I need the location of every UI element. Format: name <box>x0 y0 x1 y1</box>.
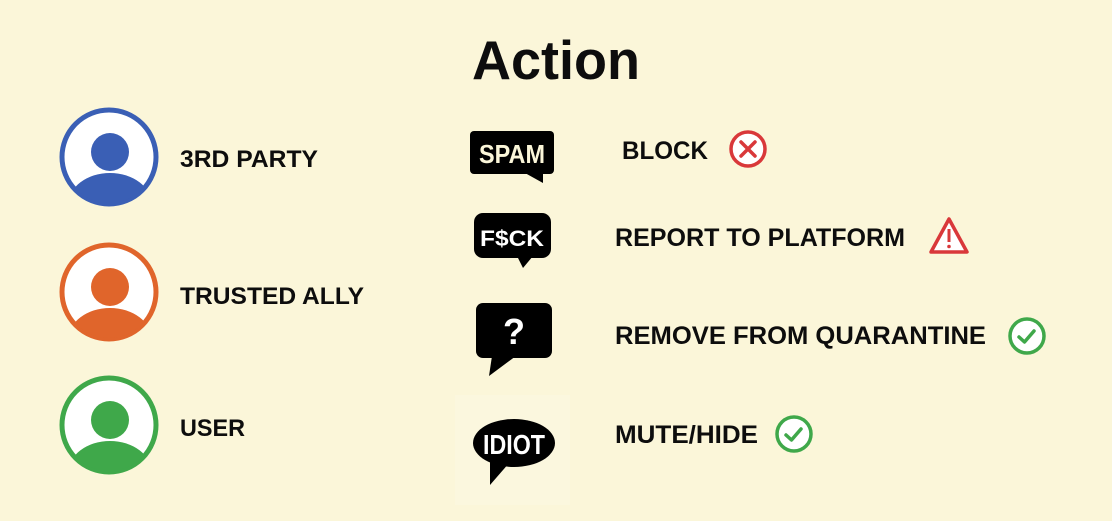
label: report to platform: REPORT TO PLATFORM <box>615 224 905 252</box>
icon: spam bubble: SPAM <box>479 139 545 169</box>
label: trusted ally: TRUSTED ALLY <box>180 283 364 310</box>
icon: question bubble <box>476 303 552 376</box>
label: remove from quarantine: REMOVE FROM QUARANTINE <box>615 322 986 350</box>
icon: warning <box>931 219 967 252</box>
avatar: user <box>60 376 158 474</box>
icon: question bubble: ? <box>503 311 525 352</box>
icon: idiot bubble: IDIOT <box>483 429 545 460</box>
label: 3rd party: 3RD PARTY <box>180 146 318 173</box>
icon: block x <box>731 132 765 166</box>
label: block: BLOCK <box>622 137 708 165</box>
icon: spam bubble <box>470 131 554 183</box>
label: mute/hide: MUTE/HIDE <box>615 421 758 449</box>
icon: check 1 <box>1010 319 1044 353</box>
icon: f$ck bubble: F$CK <box>480 226 544 251</box>
icon: idiot bubble <box>455 395 570 505</box>
avatar: trusted ally <box>60 242 158 342</box>
label: user: USER <box>180 415 245 442</box>
title: Action <box>472 29 640 91</box>
icon: check 2 <box>777 417 811 451</box>
icon: f$ck bubble <box>474 213 551 268</box>
avatar: 3rd party <box>60 108 158 206</box>
